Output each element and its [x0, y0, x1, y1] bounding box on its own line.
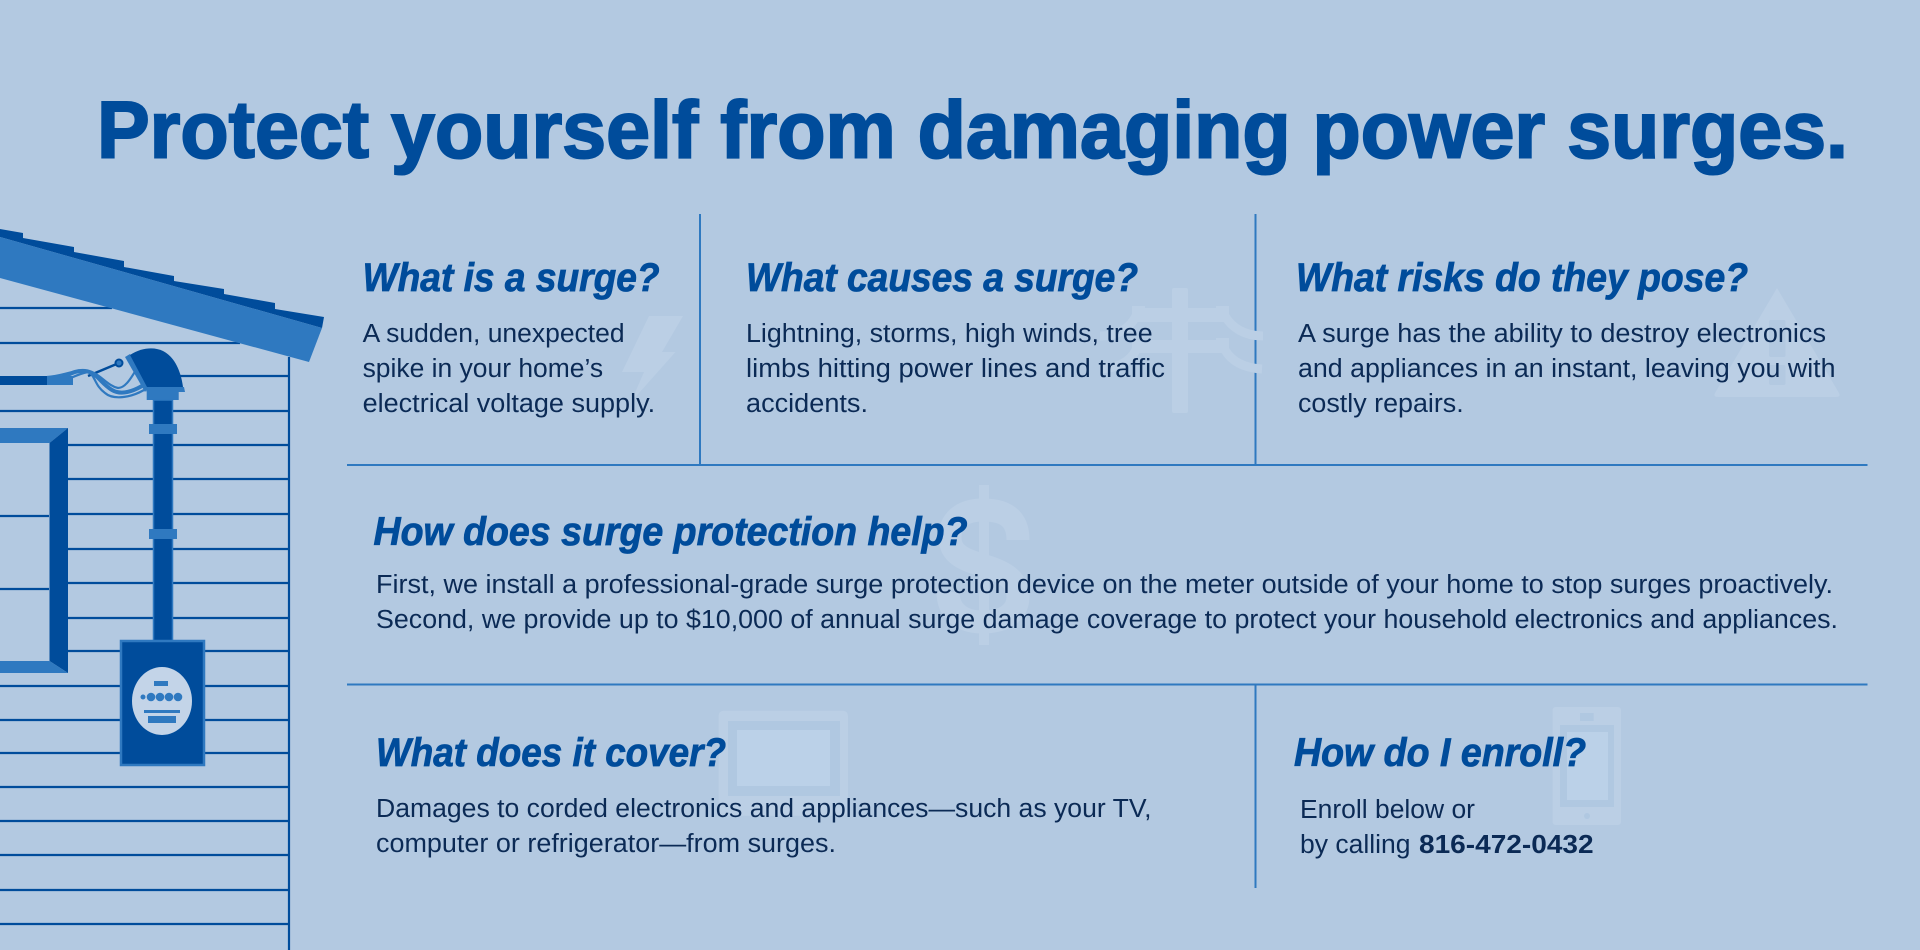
body text: Damages to corded electronics and appliances—such as your TV, [376, 795, 1152, 823]
body text [1298, 320, 1836, 418]
panel: how does surge protection help [374, 485, 1838, 645]
body text: accidents. [746, 390, 868, 418]
heading: How do I enroll? [1294, 731, 1586, 775]
window frame [0, 428, 68, 673]
electric meter [121, 641, 204, 765]
illustration: house with meter [0, 229, 324, 950]
body text: by calling [1300, 831, 1410, 859]
icon: warning triangle [1714, 288, 1840, 397]
heading: What causes a surge? [746, 256, 1138, 300]
icon: smartphone [1553, 707, 1621, 825]
body text: electrical voltage supply. [363, 390, 655, 418]
body text: and appliances in an instant, leaving you with [1298, 355, 1836, 383]
body text: computer or refrigerator—from surges. [376, 830, 836, 858]
title: Protect yourself from damaging power surges. [97, 86, 1848, 176]
conduit [149, 400, 177, 641]
icon: lightning bolt [622, 316, 683, 402]
heading: What risks do they pose? [1296, 256, 1748, 300]
body text [376, 795, 1152, 858]
body text: limbs hitting power lines and traffic [746, 355, 1165, 383]
panel: what risks do they pose [1296, 256, 1840, 418]
phone number: 816-472-0432 [1419, 831, 1594, 859]
weatherhead [125, 348, 185, 400]
body text [376, 571, 1838, 634]
body text [363, 320, 655, 418]
service cable [0, 360, 144, 397]
heading: How does surge protection help? [374, 510, 968, 554]
body text: Lightning, storms, high winds, tree [746, 320, 1153, 348]
panel: what is a surge [363, 256, 683, 418]
body text: costly repairs. [1298, 390, 1464, 418]
panel: how do I enroll [1294, 707, 1621, 859]
body text: spike in your home’s [363, 355, 603, 383]
body text: Enroll below or [1300, 796, 1476, 824]
heading: What does it cover? [376, 731, 726, 775]
roof [0, 229, 324, 362]
panel: what does it cover [376, 711, 1152, 858]
body text: A sudden, unexpected [363, 320, 625, 348]
panel: what causes a surge [746, 256, 1263, 418]
body text: A surge has the ability to destroy electronics [1298, 320, 1826, 348]
grid divider lines [347, 214, 1868, 888]
icon: television [719, 711, 848, 816]
body text: First, we install a professional-grade surge protection device on the meter outside of your home to stop surges proactively. [376, 571, 1833, 599]
icon: power pole [1100, 288, 1263, 413]
body text [1300, 796, 1594, 859]
heading: What is a surge? [363, 256, 660, 300]
body text [746, 320, 1165, 418]
icon: dollar sign [948, 485, 1018, 645]
body text: Second, we provide up to $10,000 of annual surge damage coverage to protect your household electronics and appliances. [376, 606, 1838, 634]
